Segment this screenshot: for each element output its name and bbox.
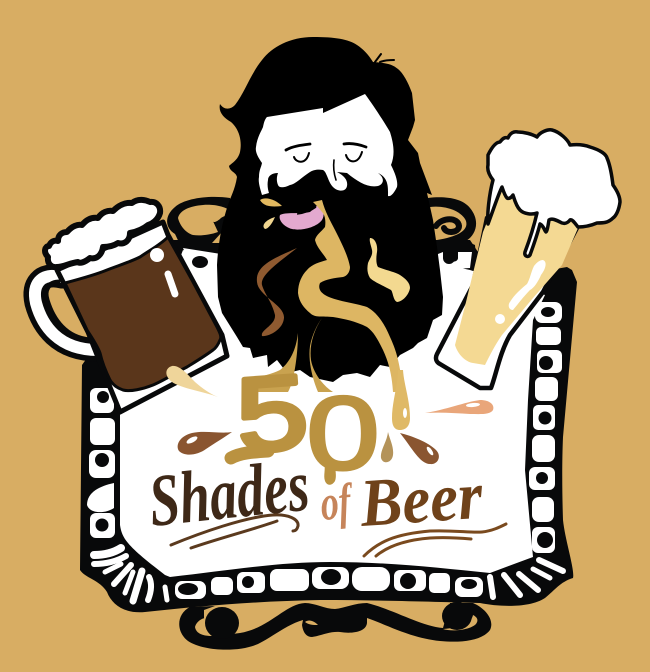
beer stream: brown <box>257 248 297 336</box>
light drip <box>392 370 410 430</box>
handle <box>35 276 98 350</box>
frame: right ornament column <box>529 302 562 553</box>
pale drop from mug <box>166 366 218 397</box>
splash droplets <box>178 370 493 464</box>
hair tuft <box>375 54 394 62</box>
glass body <box>436 218 577 388</box>
beer stream: pale <box>367 238 410 302</box>
beer streams into the 50 <box>243 200 403 392</box>
tongue <box>280 205 324 230</box>
hair and beard <box>217 37 443 382</box>
brown drop left <box>178 432 232 455</box>
dark beer <box>65 237 221 391</box>
tail of 5 <box>231 451 268 458</box>
word: Beer: Beer <box>357 457 485 541</box>
number 50 <box>231 352 380 492</box>
branch streams <box>243 333 298 392</box>
frame: white panel <box>120 250 545 577</box>
frame: bottom ornament row <box>175 567 483 599</box>
word: of: of <box>318 472 356 531</box>
glass body and base <box>57 222 227 412</box>
top left scroll <box>167 197 235 272</box>
beer <box>455 180 578 365</box>
digit 0: 0 <box>306 375 380 492</box>
mascot: bearded head <box>217 37 443 382</box>
mouth droplets <box>260 198 282 206</box>
digit 5: 5 <box>232 352 312 474</box>
highlights <box>150 248 164 262</box>
frame: black border <box>80 240 577 612</box>
swashes under title <box>171 515 506 556</box>
frame: left ornament column <box>87 388 115 538</box>
bottom scroll ornament <box>179 602 491 650</box>
small tan drip <box>381 432 393 462</box>
face <box>256 94 397 196</box>
title: Shades of Beer <box>145 445 485 543</box>
main stream <box>298 200 403 392</box>
foam <box>488 130 620 256</box>
foam <box>45 200 160 267</box>
highlights <box>509 260 546 310</box>
top right scroll <box>428 197 476 270</box>
brown drop right <box>400 433 439 464</box>
peach drop <box>425 400 493 414</box>
drip under 0 <box>324 462 336 485</box>
word: Shades: Shades <box>145 445 313 543</box>
frame: corner stripes <box>94 548 563 601</box>
eyes and brows <box>286 144 366 180</box>
beer mug <box>35 200 227 412</box>
wheat beer glass <box>436 130 620 388</box>
